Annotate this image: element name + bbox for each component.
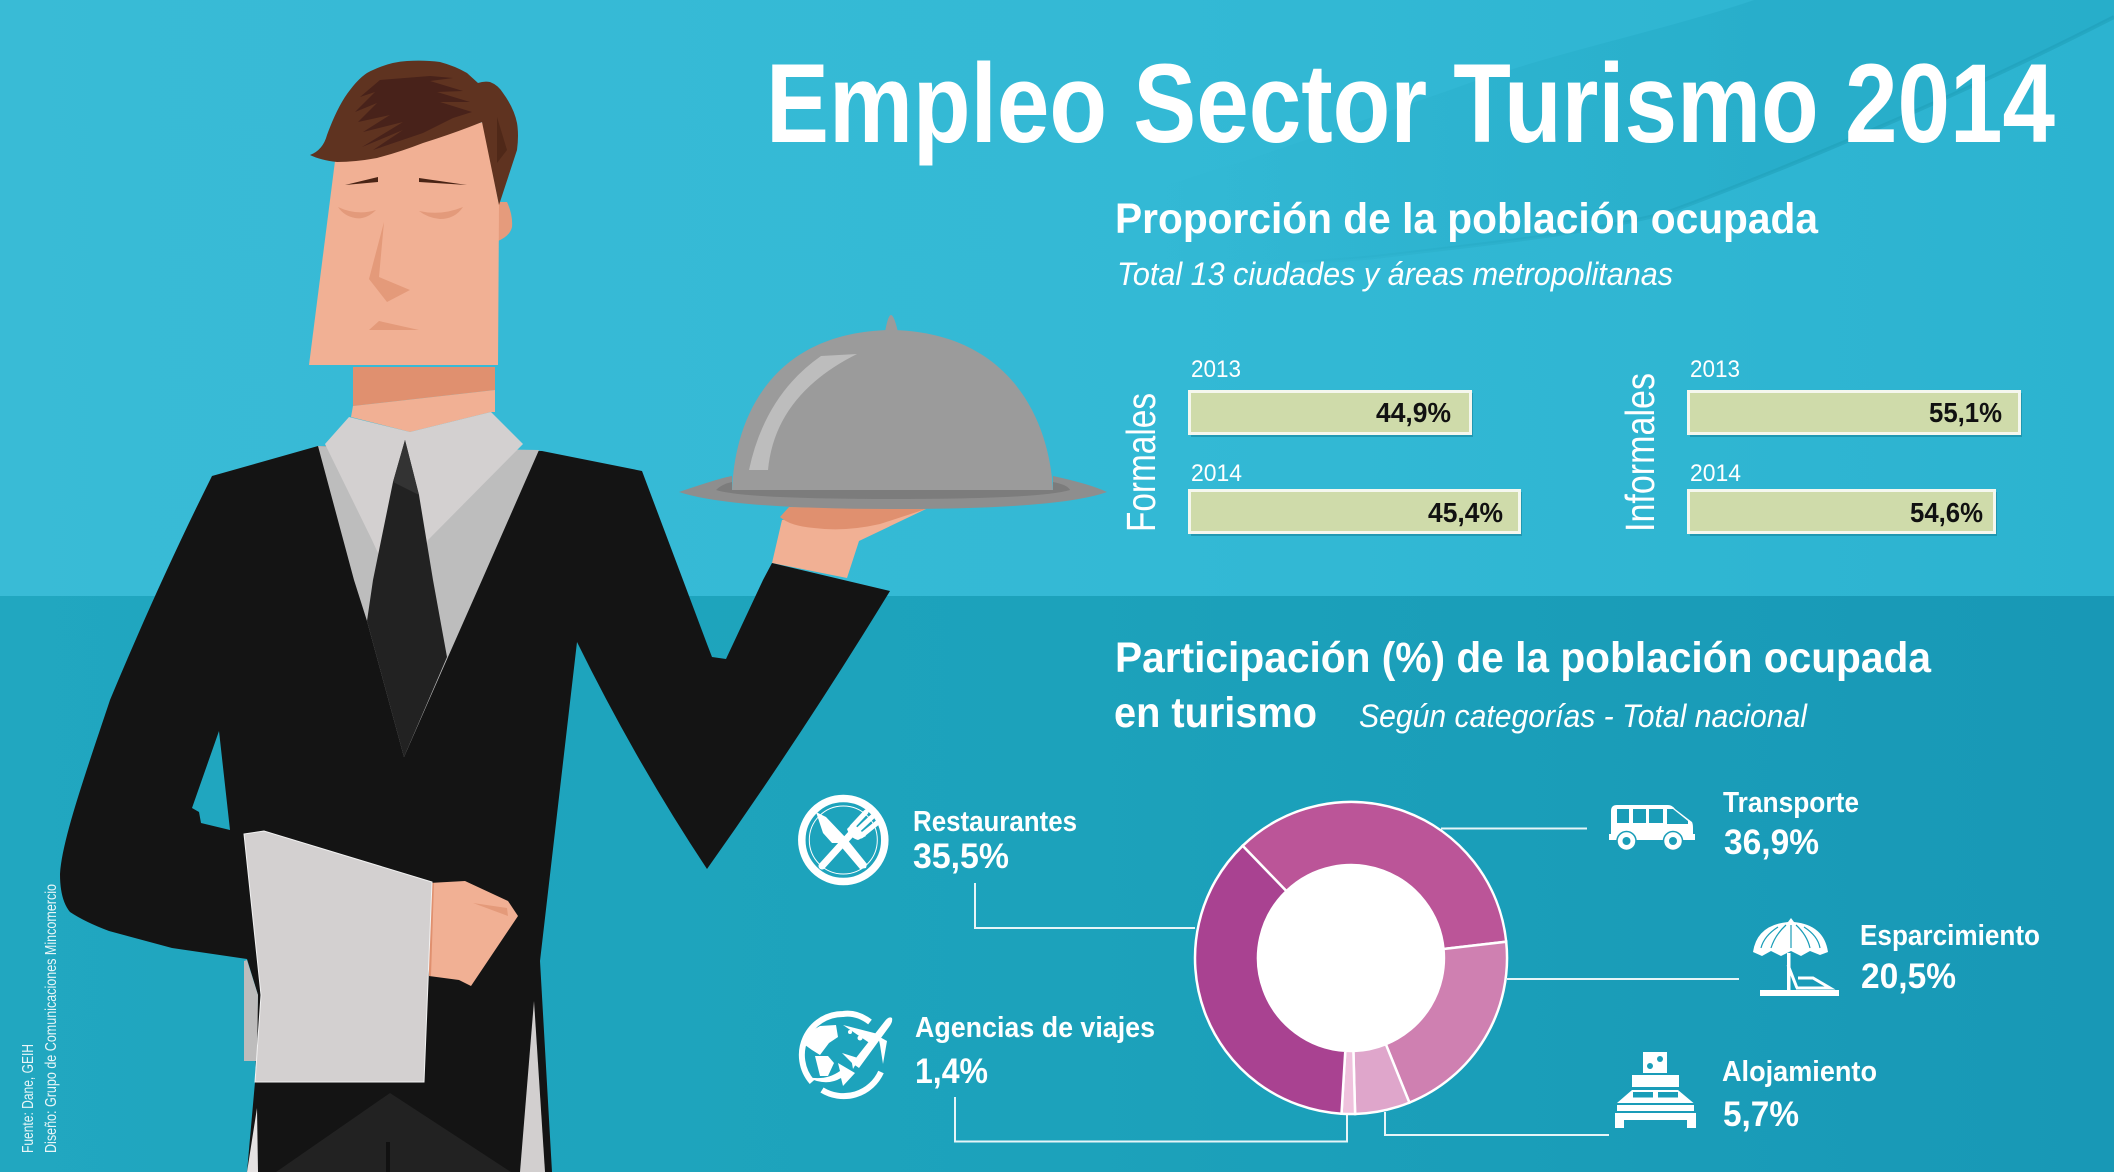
label: restaurantes: Restaurantes: [913, 806, 1077, 838]
serving dome: [732, 315, 1053, 492]
bar chart: formales: 44,9%: [1376, 397, 1451, 428]
label: agencias de viajes: 1,4%: [915, 1052, 988, 1091]
bar chart: formales: Formales: [1118, 393, 1164, 532]
trousers: [276, 1093, 511, 1172]
suit jacket: [60, 446, 890, 1172]
heading: participación: en turismo: [1114, 689, 1317, 737]
bar chart: formales: 2013: [1191, 356, 1241, 383]
label: esparcimiento: [1860, 920, 2040, 996]
bar chart: informales: Informales: [1617, 373, 1663, 532]
necktie: [367, 440, 447, 757]
bar chart: informales: 2014: [1690, 460, 1741, 487]
label: agencias de viajes: [915, 1012, 1155, 1091]
segment: restaurantes: [1195, 846, 1345, 1114]
shirt collar: [325, 412, 523, 590]
bar chart: informales: 54,6%: [1910, 497, 1983, 528]
credits: [20, 884, 60, 1153]
heading: participación: Participación (%) de la población ocupada: [1115, 634, 1932, 682]
label: transporte: 36,9%: [1724, 823, 1819, 862]
bar chart: formales: 2014: [1191, 460, 1242, 487]
waiter figure: [60, 61, 1107, 1172]
ear: [498, 202, 512, 241]
bar chart: formales: 45,4%: [1428, 497, 1503, 528]
icon: plate and cutlery: [802, 798, 885, 882]
label: restaurantes: [913, 806, 1077, 876]
heading: participación: [1114, 634, 1932, 737]
icon: bus: [1609, 805, 1695, 850]
leader lines: [955, 828, 1739, 1142]
hair: [310, 61, 518, 205]
segment: agencias: [1342, 1051, 1355, 1114]
credits: Fuente: Dane, GEIH: [20, 1044, 37, 1153]
serving tray: [679, 476, 1107, 509]
coat tail linings: [244, 960, 545, 1172]
icon: hotel bed: [1615, 1052, 1696, 1128]
label: alojamiento: Alojamiento: [1722, 1056, 1877, 1088]
bar chart: formales: [1118, 356, 1522, 536]
icon: globe and plane: [802, 1014, 892, 1096]
label: transporte: Transporte: [1723, 787, 1859, 819]
resting hand: [429, 881, 518, 986]
label: esparcimiento: Esparcimiento: [1860, 920, 2040, 952]
label: alojamiento: 5,7%: [1723, 1095, 1799, 1134]
subheading: proporción: Total 13 ciudades y áreas metropolitanas: [1117, 256, 1673, 292]
nose: [369, 222, 410, 302]
label: restaurantes: 35,5%: [913, 837, 1009, 876]
mouth: [369, 321, 419, 330]
closed eyes: [338, 207, 463, 219]
bar chart: informales: [1617, 356, 2022, 536]
label: esparcimiento: 20,5%: [1861, 957, 1956, 996]
segment: esparcimiento: [1386, 942, 1507, 1103]
napkin: [244, 831, 432, 1082]
serving hand: [772, 507, 926, 578]
label: alojamiento: [1722, 1056, 1877, 1134]
donut hole: [1258, 865, 1444, 1051]
bar chart: informales: 2013: [1690, 356, 1740, 383]
bar chart: informales: 55,1%: [1929, 397, 2002, 428]
credits: Diseño: Grupo de Comunicaciones Mincomercio: [43, 884, 60, 1153]
face: [309, 122, 499, 365]
neck: [351, 367, 495, 432]
subheading: participación: Según categorías - Total nacional: [1359, 698, 1808, 734]
donut chart: [1195, 802, 1507, 1114]
icon: beach umbrella and lounger: [1753, 918, 1839, 996]
label: transporte: [1723, 787, 1859, 862]
eyebrows: [345, 177, 467, 185]
segment: alojamiento: [1353, 1044, 1409, 1114]
vest and lapels: [318, 446, 539, 757]
label: agencias de viajes: Agencias de viajes: [915, 1012, 1155, 1044]
background: upper sky band: [0, 0, 2114, 597]
heading: proporción: Proporción de la población ocupada: [1115, 195, 1819, 243]
segment: transporte: [1243, 802, 1506, 949]
background: lower band: [0, 596, 2114, 1172]
